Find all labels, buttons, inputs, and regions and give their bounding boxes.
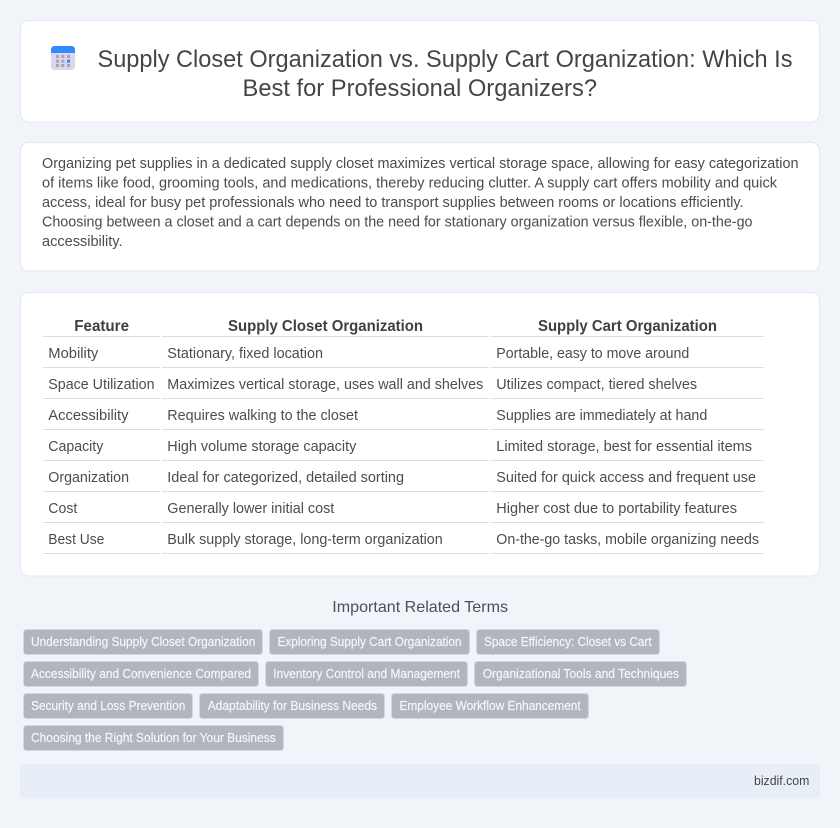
- table header row: Supply Cart Organization: [538, 318, 717, 335]
- row: organization: [48, 470, 756, 486]
- tag: understanding supply closet organization: [24, 630, 262, 654]
- row: accessibility: Accessibility: [48, 408, 129, 424]
- tag: choosing the right solution: [24, 726, 284, 750]
- row: accessibility: Requires walking to the closet: [167, 408, 358, 424]
- footer bar: [20, 764, 820, 798]
- tag: space efficiency: Space Efficiency: Closet vs Cart: [484, 635, 652, 649]
- row: space utilization: Maximizes vertical storage, uses wall and shelves: [167, 377, 483, 393]
- tag: organizational tools: Organizational Tools and Techniques: [483, 667, 679, 681]
- row: cost: Generally lower initial cost: [167, 501, 334, 517]
- intro text block: [42, 156, 798, 250]
- tag: employee workflow: Employee Workflow Enhancement: [400, 699, 581, 713]
- tag: choosing the right solution: Choosing the Right Solution for Your Business: [31, 731, 276, 745]
- tag: accessibility and convenience: [24, 662, 258, 686]
- tag: organizational tools: [474, 662, 686, 686]
- row: organization: Ideal for categorized, detailed sorting: [167, 470, 404, 486]
- tag: accessibility and convenience: Accessibility and Convenience Compared: [31, 667, 251, 681]
- row: capacity: Limited storage, best for essential items: [496, 439, 752, 455]
- row: cost: [48, 501, 737, 517]
- intro text block: Choosing between a closet and a cart depends on the need for stationary organization versus flexible, on-the-go: [42, 214, 752, 230]
- panel: intro paragraph: [20, 142, 820, 271]
- footer site name: bizdif.com: [754, 773, 809, 788]
- row: space utilization: [48, 377, 697, 393]
- table header row: [74, 318, 717, 335]
- panel: title header: [20, 20, 820, 122]
- row: best use: On-the-go tasks, mobile organizing needs: [496, 532, 759, 548]
- title: Best for Professional Organizers?: [242, 75, 597, 102]
- intro text block: Organizing pet supplies in a dedicated supply closet maximizes vertical storage space, allowing for easy categorization: [42, 156, 798, 172]
- row: mobility: Stationary, fixed location: [167, 346, 323, 362]
- row: best use: Bulk supply storage, long-term organization: [167, 532, 443, 548]
- title: [98, 46, 792, 102]
- row: organization: Organization: [48, 470, 129, 486]
- tag: adaptability: Adaptability for Business Needs: [208, 699, 377, 713]
- row: cost: Cost: [48, 501, 77, 517]
- row: capacity: Capacity: [48, 439, 104, 455]
- row: capacity: High volume storage capacity: [167, 439, 357, 455]
- row: mobility: [48, 346, 689, 362]
- tag: exploring supply cart organization: [270, 630, 470, 654]
- tag: inventory control: [266, 662, 468, 686]
- tag: inventory control: Inventory Control and Management: [273, 667, 460, 681]
- tag: security and loss prevention: Security and Loss Prevention: [31, 699, 185, 713]
- panel: comparison table: [20, 292, 820, 576]
- icon: supply calendar grid: [51, 46, 75, 70]
- row: accessibility: Supplies are immediately at hand: [496, 408, 707, 424]
- intro text block: access, ideal for busy pet professionals who need to transport supplies between rooms or locations efficiently.: [42, 195, 744, 211]
- row: best use: Best Use: [48, 532, 104, 548]
- row: cost: Higher cost due to portability features: [496, 501, 737, 517]
- intro text block: accessibility.: [42, 234, 122, 250]
- tag: understanding supply closet organization: Understanding Supply Closet Organization: [31, 635, 255, 649]
- tag: adaptability: [200, 694, 384, 718]
- related terms tags: [24, 630, 686, 750]
- table header row: Supply Closet Organization: [228, 318, 423, 335]
- tag: security and loss prevention: [24, 694, 192, 718]
- row: capacity: [48, 439, 752, 455]
- tag: employee workflow: [392, 694, 588, 718]
- tag: space efficiency: [476, 630, 660, 654]
- row: mobility: Portable, easy to move around: [496, 346, 689, 362]
- row: accessibility: [48, 408, 707, 424]
- row: mobility: Mobility: [48, 346, 99, 362]
- row: organization: Suited for quick access and frequent use: [496, 470, 756, 486]
- row: space utilization: Utilizes compact, tiered shelves: [496, 377, 697, 393]
- tag: exploring supply cart organization: Exploring Supply Cart Organization: [278, 635, 462, 649]
- title: Supply Closet Organization vs. Supply Cart Organization: Which Is: [98, 46, 792, 73]
- intro text block: of items like food, grooming tools, and medications, thereby reducing clutter. A supply cart offers mobility and quick: [42, 176, 778, 192]
- row: space utilization: Space Utilization: [48, 377, 154, 393]
- row: best use: [48, 532, 759, 548]
- heading: important related terms: Important Related Terms: [332, 599, 508, 616]
- table header row: Feature: [74, 318, 129, 335]
